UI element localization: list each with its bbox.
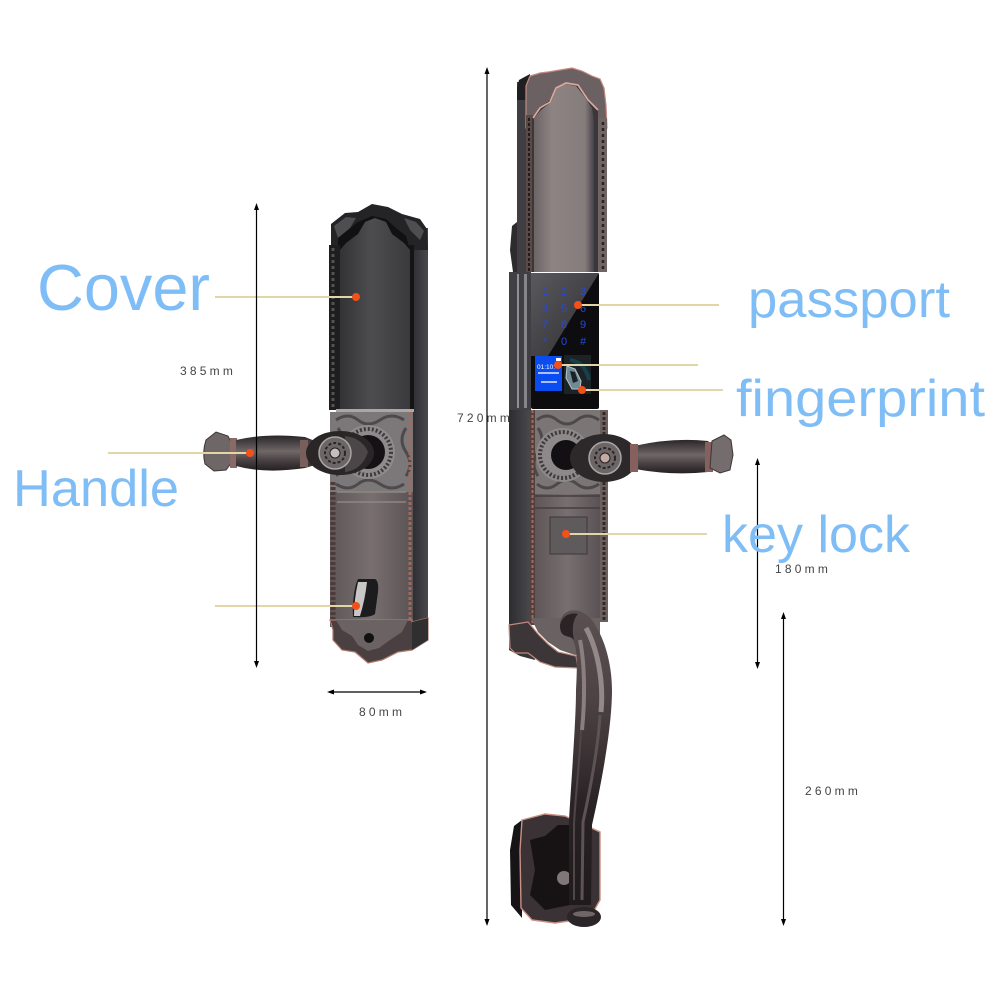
right lock rope borders [526,115,533,272]
keypad digits: # [580,336,587,348]
keypad digits: * [543,336,548,348]
right handle end cap [710,435,733,473]
left lock lower plate [330,492,413,627]
right lock left rail [509,272,531,410]
left lever handle [204,431,374,475]
right lock lower section [509,410,608,668]
leader line: handle [108,449,254,457]
dimension text: 180mm: 180mm [775,562,831,576]
leader line: fingerprint [578,386,723,394]
keypad digits: 6 [580,303,586,315]
left handle knob [306,431,374,475]
left lock keyhole [364,633,374,643]
keypad digits: 7 [542,319,548,331]
key lock cover [550,517,587,554]
leader line: cover [215,293,360,301]
label: Cover: Cover [37,251,210,324]
keypad digits: 5 [561,303,567,315]
left handle shaft [236,436,325,471]
right lock touch panel [531,273,599,409]
right lock upper plate [532,84,598,272]
label: passport: passport [748,271,951,329]
pull handle [560,610,612,927]
right handle shaft [630,440,712,473]
fingerprint sensor [564,355,591,394]
keypad digits: 1 [542,286,548,298]
dimension text: 385mm: 385mm [180,364,236,378]
leader line: display [554,361,698,369]
left lock escutcheon [330,412,413,492]
pull handle foot [567,907,601,927]
glass keypad panel [531,273,599,409]
dimension arrow: 720mm [484,67,490,926]
left handle end cap [204,432,232,471]
leader line: thumb turn [215,602,360,610]
label: Handle: Handle [13,460,179,518]
right bottom scroll [531,618,600,655]
keypad digits [542,286,587,348]
left lock top ornament [331,204,428,250]
left lock cover panel [340,218,410,410]
dimension arrow: 180mm [755,458,760,669]
leader line: passport [574,301,719,309]
keypad digits: 3 [580,286,586,298]
right lever handle [570,434,733,482]
right handle neck [570,434,638,482]
left lock thumb turn [353,579,378,617]
left lock bottom scroll [330,618,428,663]
dimension text: 720mm: 720mm [457,411,513,425]
label: fingerprint: fingerprint [736,370,986,428]
left lock body [329,204,428,663]
leader line: key lock [562,530,707,538]
right lock top ornament [526,68,607,128]
bottom mounting plate [510,814,600,923]
right escutcheon [530,410,607,494]
right lock upper side [517,82,526,272]
keypad digits: 8 [561,319,567,331]
right lock body [509,68,607,660]
keypad digits: 9 [580,319,586,331]
dimension text: 80mm: 80mm [359,705,405,719]
left lock rope borders [329,245,340,410]
left lock side strip [412,228,428,640]
dimension text: 260mm: 260mm [805,784,861,798]
dimension arrow: 260mm [781,612,786,926]
blue display: 01:10: [537,364,555,371]
right lower plate [535,494,600,619]
dimension arrow: 80mm [327,690,427,694]
right handle knob [589,442,621,474]
rosette [536,428,590,482]
label: key lock: key lock [722,506,911,564]
dimension arrow: 385mm [254,203,259,668]
keypad digits: 0 [561,336,567,348]
keypad digits: 4 [542,303,548,315]
keypad digits: 2 [561,286,567,298]
